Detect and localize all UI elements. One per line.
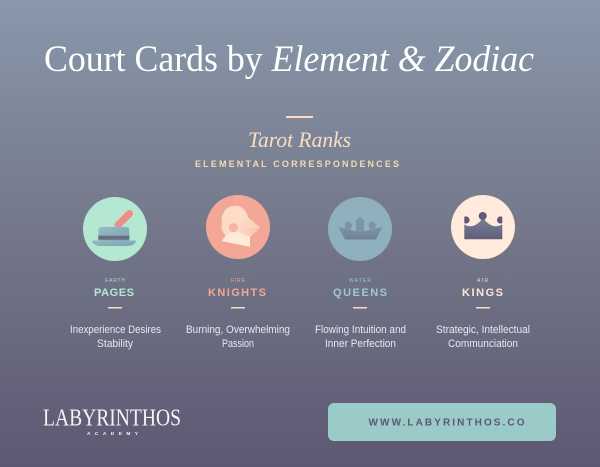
title: Court Cards by Element & Zodiac: [44, 39, 535, 80]
description: kings: Communciation: [448, 338, 518, 350]
website button: WWW.LABYRINTHOS.CO: [368, 418, 525, 428]
icon: queen crown: [328, 197, 392, 261]
description: pages: Stability: [97, 338, 134, 350]
dash: [108, 307, 122, 308]
heading: knights: KNIGHTS: [208, 287, 266, 299]
label: water: WATER: [349, 278, 371, 284]
heading: pages: PAGES: [94, 287, 134, 299]
description: kings: Strategic, Intellectual: [436, 324, 530, 336]
description: pages: Inexperience Desires: [70, 324, 162, 336]
website button: [328, 403, 556, 441]
column: kings: [436, 195, 530, 350]
column: pages: [70, 197, 162, 350]
description: queens: Flowing Intuition and: [315, 324, 406, 336]
logo: labyrinthos academy: ACADEMY: [87, 431, 139, 437]
description: knights: [186, 324, 290, 350]
description: queens: [315, 324, 406, 350]
heading: queens: QUEENS: [333, 287, 387, 299]
icon: king crown: [451, 195, 515, 259]
icon: knight helmet: [206, 195, 270, 259]
dash: [231, 307, 245, 308]
description: kings: [436, 324, 530, 350]
heading: kings: KINGS: [462, 287, 503, 299]
label: fire: FIRE: [231, 278, 246, 284]
logo: labyrinthos academy: LABYRINTHOS: [43, 406, 181, 432]
description: queens: Inner Perfection: [325, 338, 396, 350]
dash: [476, 307, 490, 308]
icon: hat with feather: [83, 197, 147, 261]
subtitle: tarot ranks: Tarot Ranks: [248, 127, 351, 152]
description: knights: Passion: [222, 338, 254, 350]
accent dash: [286, 116, 313, 118]
subheading: elemental correspondences: ELEMENTAL CORRESPONDENCES: [195, 159, 399, 169]
label: earth: EARTH: [105, 278, 125, 284]
label: air: AIR: [477, 278, 488, 284]
description: pages: [70, 324, 162, 350]
column: queens: [315, 197, 406, 350]
logo: labyrinthos academy: [43, 406, 181, 437]
description: knights: Burning, Overwhelming: [186, 324, 290, 336]
column: knights: [186, 195, 290, 350]
dash: [353, 307, 367, 308]
